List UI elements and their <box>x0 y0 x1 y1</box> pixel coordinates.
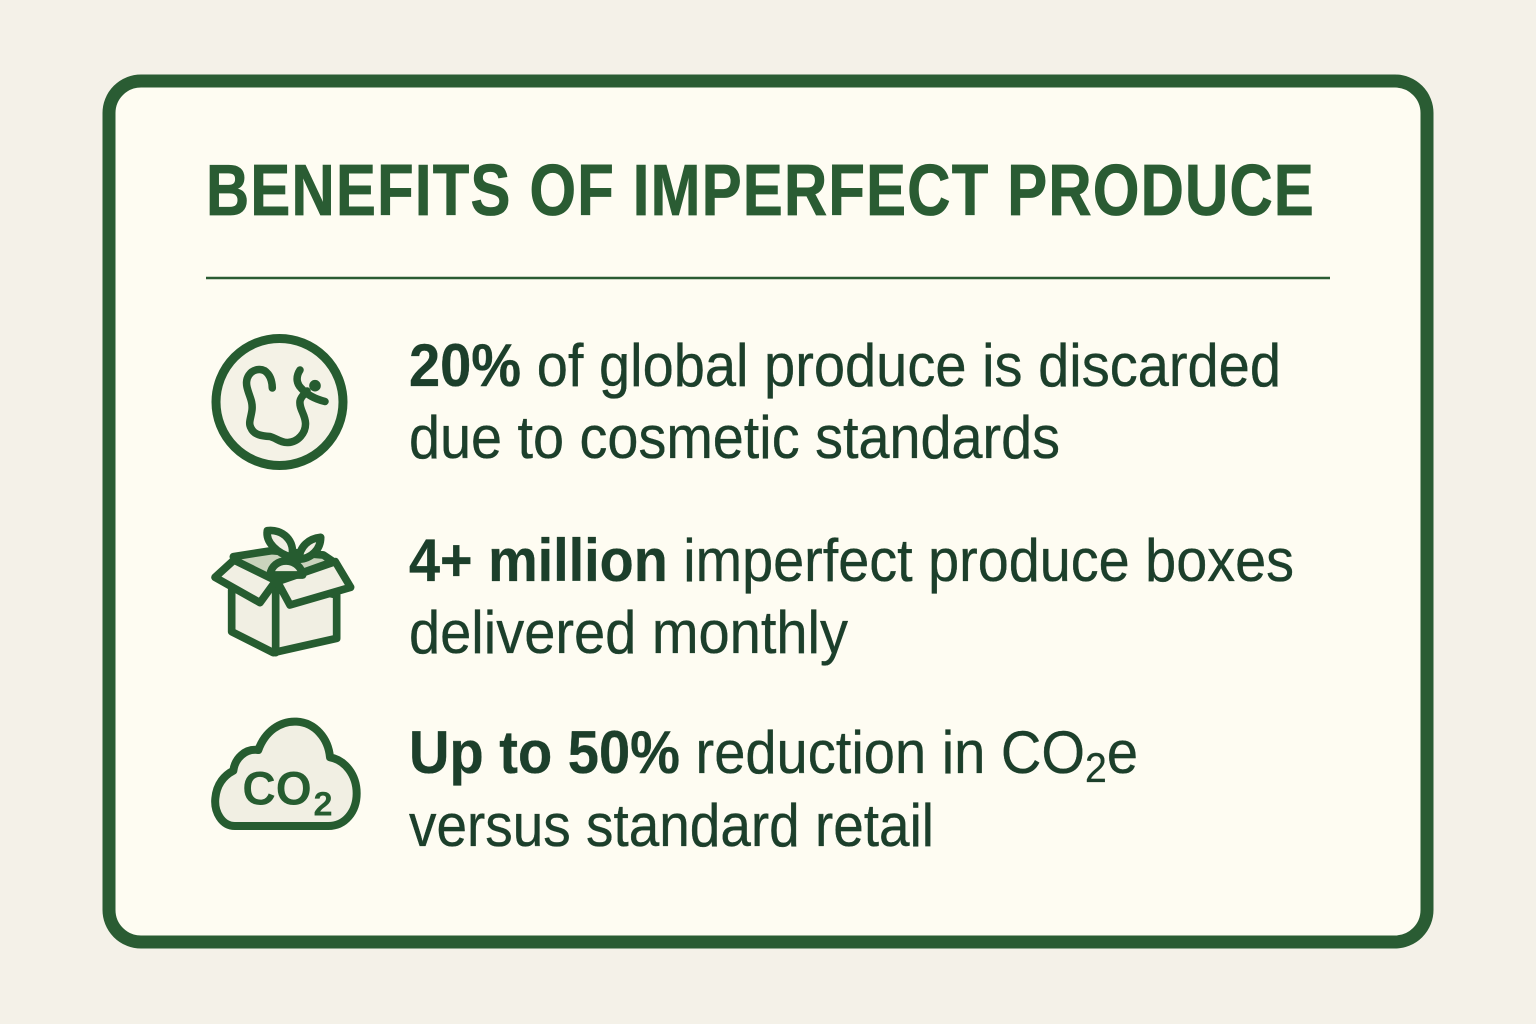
panel: benefits card <box>109 81 1427 942</box>
icon: open produce box <box>215 530 351 653</box>
text: CO2e reduction stat <box>409 719 1138 859</box>
text: CO2e reduction stat: e <box>1107 719 1138 786</box>
text: boxes delivered stat: 4+ million imperfect produce boxes <box>409 527 1294 594</box>
icon: CO2 cloud: CO <box>242 762 312 815</box>
title: BENEFITS OF IMPERFECT PRODUCE <box>206 150 1315 231</box>
icon: CO2 cloud <box>215 722 357 826</box>
icon: CO2 cloud: 2 <box>313 785 333 823</box>
text: CO2e reduction stat: Up to 50% reduction in CO <box>409 719 1114 786</box>
text: discarded produce stat: due to cosmetic standards <box>409 404 1060 471</box>
text: discarded produce stat <box>409 332 1281 471</box>
text: boxes delivered stat <box>409 527 1294 666</box>
text: discarded produce stat: 20% of global produce is discarded <box>409 332 1281 399</box>
icon: misshapen produce in circle <box>216 338 343 466</box>
text: CO2e reduction stat: versus standard retail <box>409 792 934 859</box>
text: CO2e reduction stat: 2 <box>1085 744 1107 791</box>
text: boxes delivered stat: delivered monthly <box>409 599 848 666</box>
